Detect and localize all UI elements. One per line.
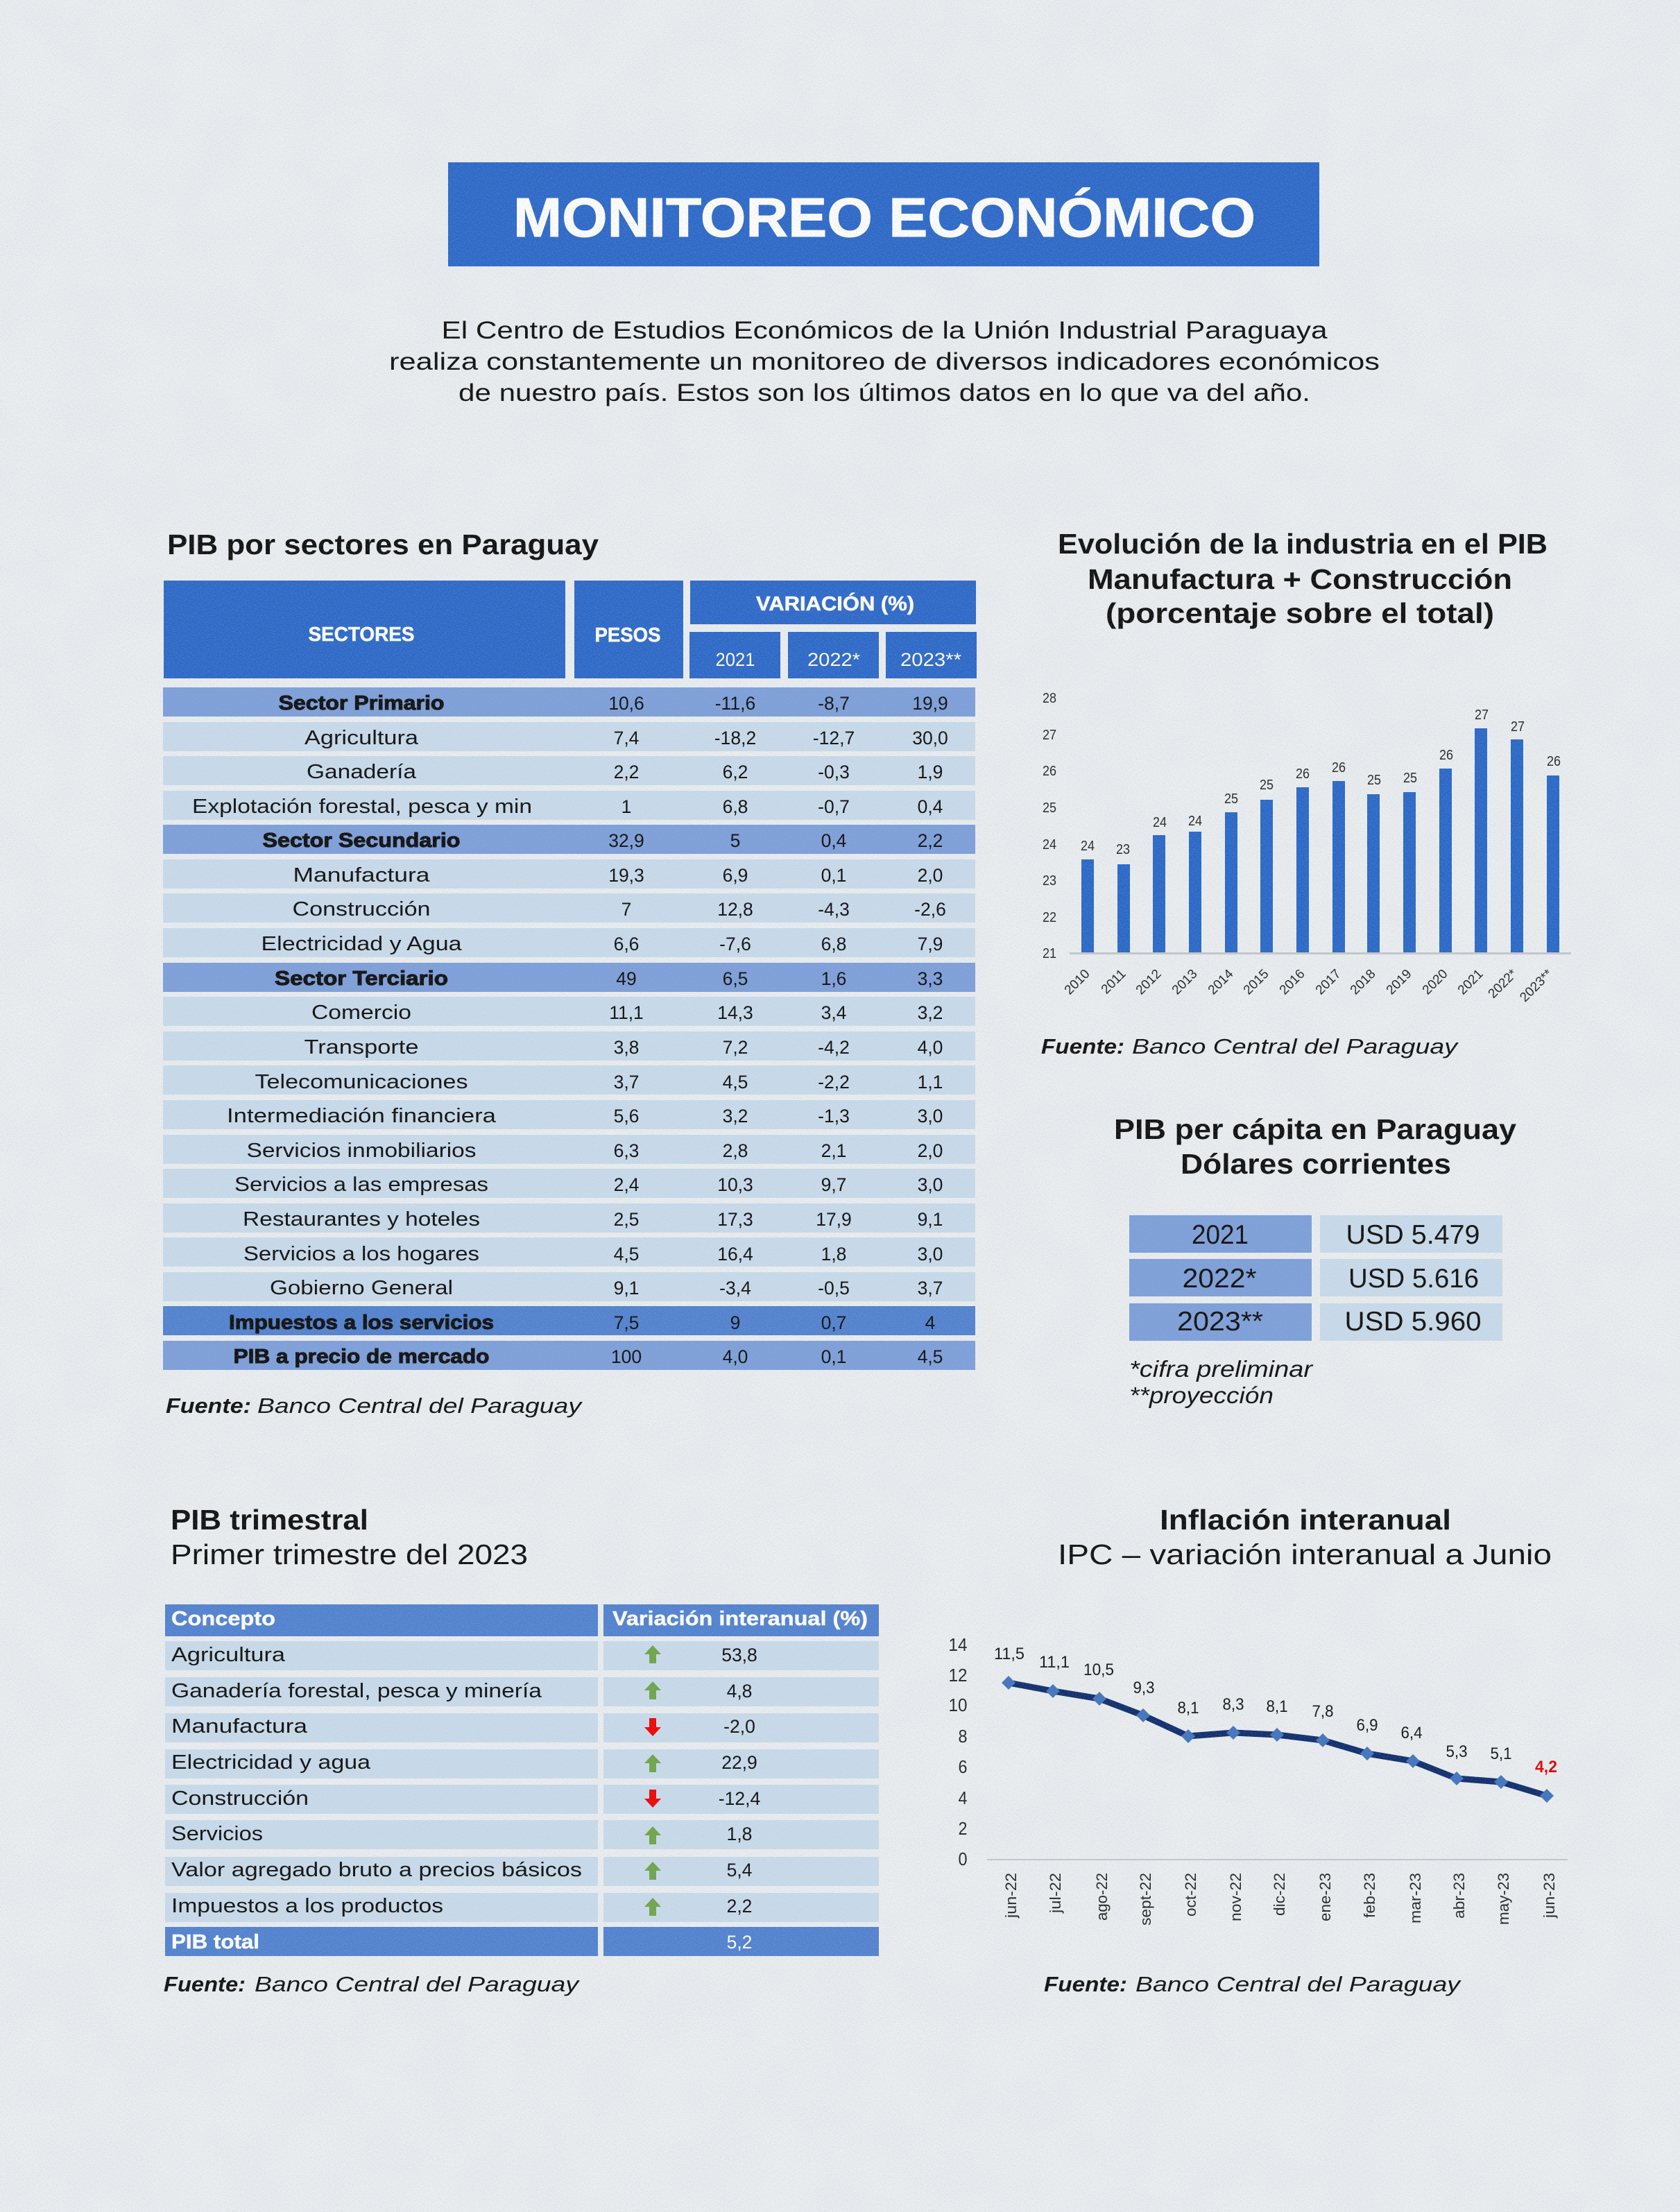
y axis labels [1043, 691, 1056, 961]
table header: Variación interanual (%) [612, 1608, 868, 1630]
row: Sector Primario: 10,6 [608, 693, 644, 714]
y axis labels: 10 [949, 1695, 967, 1715]
panel: PIB por sectores table [163, 581, 977, 1370]
row: Construcción: Construcción [171, 1787, 309, 1810]
row: Sector Secundario: 32,9 [608, 830, 644, 851]
row: Impuestos a los productos: Impuestos a los productos [171, 1895, 443, 1917]
data labels: 4,2 [1535, 1758, 1557, 1776]
row: Manufactura: 0,1 [821, 865, 846, 886]
row: Electricidad y agua [165, 1749, 879, 1778]
table header [164, 581, 977, 678]
intro text: de nuestro país. Estos son los últimos datos en lo que va del año. [458, 379, 1310, 406]
source: PIB trimestral: Fuente: [164, 1972, 246, 1996]
data line [1009, 1683, 1547, 1796]
row: Impuestos a los servicios: 7,5 [614, 1312, 639, 1333]
bar value labels [1081, 708, 1561, 857]
row: Ganadería: 1,9 [918, 762, 943, 782]
x axis year labels: 2010 [1062, 967, 1093, 997]
row: Intermediación financiera: -1,3 [818, 1106, 850, 1126]
heading: PIB trimestral: Primer trimestre del 2023 [171, 1538, 528, 1570]
heading: Inflación interanual: IPC – variación interanual a Junio [1058, 1538, 1552, 1570]
row: PIB total [165, 1927, 879, 1956]
x axis year labels: 2013 [1169, 967, 1201, 997]
row: Agricultura: Agricultura [305, 727, 418, 749]
x axis year labels: 2023** [1517, 966, 1556, 1005]
panel: PIB per cápita table [1129, 1215, 1502, 1341]
row: Servicios: 1,8 [727, 1824, 752, 1844]
row: Construcción [293, 898, 946, 920]
x axis year labels: 2019 [1384, 967, 1415, 997]
row: Manufactura: Manufactura [293, 864, 430, 886]
bars [1081, 728, 1559, 953]
row: PIB a precio de mercado: 4,0 [723, 1346, 748, 1367]
bar value labels: 23 [1116, 842, 1130, 857]
row: Impuestos a los servicios: 9 [730, 1312, 740, 1333]
y axis labels: 23 [1043, 873, 1056, 889]
y axis labels: 12 [949, 1665, 967, 1686]
row: PIB a precio de mercado: PIB a precio de mercado [233, 1346, 490, 1368]
row: Servicios a los hogares: 4,5 [614, 1244, 639, 1264]
panel: PIB trimestral table [165, 1604, 879, 1956]
x axis month labels: feb-23 [1361, 1873, 1378, 1918]
row: Servicios a las empresas: Servicios a las empresas [234, 1174, 488, 1196]
source: inflación: Banco Central del Paraguay [1135, 1972, 1462, 1996]
row: Sector Secundario: 0,4 [821, 830, 846, 851]
source: PIB por sectores: Banco Central del Paraguay [257, 1394, 583, 1418]
x axis month labels: ene-23 [1317, 1873, 1334, 1921]
row: Manufactura: 2,0 [918, 865, 943, 886]
table header: 2022* [807, 649, 861, 670]
source: evolución de la industria: Banco Central del Paraguay [1132, 1034, 1459, 1058]
x axis month labels [1002, 1873, 1558, 1926]
row: PIB a precio de mercado [233, 1346, 943, 1368]
row: Agricultura: Agricultura [171, 1644, 285, 1666]
row: Intermediación financiera [227, 1105, 943, 1127]
bar value labels: 27 [1475, 708, 1489, 723]
row: Electricidad y Agua: Electricidad y Agua [261, 933, 462, 955]
title [448, 162, 1319, 266]
row: Telecomunicaciones: Telecomunicaciones [255, 1071, 468, 1093]
row: Sector Terciario: 49 [616, 968, 637, 989]
y axis labels: 8 [959, 1726, 967, 1747]
data labels: 9,3 [1133, 1679, 1154, 1697]
row: Manufactura: 6,9 [723, 865, 748, 886]
source: inflación [1044, 1972, 1462, 1996]
bar value labels: 24 [1153, 815, 1167, 830]
y axis labels: 25 [1043, 800, 1056, 816]
data labels: 6,9 [1357, 1716, 1378, 1735]
data labels: 8,1 [1267, 1697, 1287, 1716]
x axis year labels: 2017 [1313, 967, 1344, 997]
row: Telecomunicaciones [255, 1071, 943, 1093]
row: Agricultura: 30,0 [912, 728, 948, 748]
x axis year labels: 2018 [1348, 967, 1379, 997]
y axis labels: 27 [1043, 728, 1056, 743]
heading: Evolución de la industria: (porcentaje sobre el total) [1106, 597, 1494, 629]
x axis month labels: ago-22 [1093, 1873, 1111, 1921]
y axis labels: 28 [1043, 691, 1056, 706]
x axis year labels: 2012 [1133, 967, 1165, 997]
row: Servicios [165, 1820, 879, 1849]
row: Manufactura: Manufactura [171, 1715, 307, 1738]
row: Manufactura: 19,3 [608, 865, 644, 886]
row: Restaurantes y hoteles: Restaurantes y hoteles [243, 1208, 480, 1231]
row: Intermediación financiera: 3,0 [918, 1106, 943, 1126]
row: Ganadería forestal [165, 1677, 879, 1706]
row: Ganadería forestal: 4,8 [727, 1681, 752, 1701]
panel: PIB per cápita table: 2022* [1182, 1264, 1257, 1294]
table header [165, 1604, 879, 1636]
row: Servicios inmobiliarios: 2,0 [918, 1140, 943, 1161]
x axis year labels: 2015 [1241, 967, 1272, 997]
data labels: 7,8 [1312, 1702, 1333, 1721]
y axis labels: 14 [949, 1634, 967, 1655]
x axis month labels: abr-23 [1450, 1873, 1468, 1919]
row: Comercio: Comercio [311, 1002, 411, 1024]
y axis labels: 0 [959, 1849, 967, 1869]
row: Valor agregado: 5,4 [727, 1860, 752, 1880]
row: Comercio: 14,3 [717, 1002, 753, 1023]
row: Explotación forestal: 1 [622, 796, 631, 817]
row: Transporte [304, 1036, 943, 1058]
heading: PIB per cápita: PIB per cápita en Paraguay [1114, 1113, 1517, 1145]
heading: PIB per cápita [1114, 1113, 1517, 1180]
row: Valor agregado: Valor agregado bruto a precios básicos [171, 1859, 582, 1881]
row: Comercio: 11,1 [609, 1002, 644, 1023]
row: Construcción: -4,3 [818, 899, 850, 920]
row: Agricultura [305, 727, 948, 749]
row: Restaurantes y hoteles: 17,9 [816, 1209, 852, 1230]
row: Explotación forestal [192, 796, 943, 818]
row: Sector Primario [279, 692, 948, 714]
row: Sector Terciario: 6,5 [723, 968, 748, 989]
data labels: 10,5 [1083, 1661, 1114, 1679]
row: Servicios inmobiliarios [247, 1140, 943, 1162]
row: Explotación forestal: Explotación forestal, pesca y min [192, 796, 532, 818]
row: Transporte: 4,0 [918, 1037, 943, 1058]
intro text: El Centro de Estudios Económicos de la Unión Industrial Paraguaya [441, 316, 1328, 344]
row: Servicios a los hogares [243, 1243, 943, 1265]
row: Sector Secundario: 2,2 [918, 830, 943, 851]
y axis labels: 2 [959, 1818, 967, 1839]
bar value labels: 25 [1367, 773, 1381, 788]
x axis month labels: sept-22 [1137, 1873, 1154, 1926]
row: Sector Secundario: Sector Secundario [262, 830, 461, 852]
bar value labels: 25 [1224, 791, 1238, 807]
row: Transporte: 7,2 [723, 1037, 748, 1058]
row: Impuestos a los servicios: 4 [925, 1312, 935, 1333]
row: Electricidad y agua: 22,9 [721, 1752, 757, 1773]
y axis labels: 4 [959, 1787, 967, 1808]
row: Servicios inmobiliarios: 6,3 [614, 1140, 639, 1161]
x axis month labels: nov-22 [1227, 1873, 1244, 1921]
data labels: 5,3 [1446, 1742, 1468, 1761]
x axis year labels: 2011 [1099, 967, 1129, 997]
x axis month labels: jun-23 [1541, 1873, 1558, 1919]
heading: Inflación interanual [1058, 1504, 1552, 1570]
x axis month labels: may-23 [1495, 1873, 1512, 1925]
bar chart: evolución de la industria [1043, 691, 1571, 1005]
row: Sector Secundario: 5 [730, 830, 740, 851]
row: Electricidad y Agua: -7,6 [719, 934, 751, 954]
row: Agricultura: -12,7 [813, 728, 855, 748]
source: evolución de la industria [1041, 1034, 1459, 1058]
row: Construcción: 12,8 [717, 899, 753, 920]
y axis labels: 24 [1043, 837, 1056, 852]
footnotes: *cifra preliminar [1129, 1356, 1314, 1382]
line chart: inflación interanual [949, 1634, 1568, 1926]
row: Ganadería: -0,3 [818, 762, 850, 782]
row: Servicios a las empresas: 3,0 [918, 1174, 943, 1195]
x axis year labels: 2022* [1486, 966, 1520, 1002]
row: Servicios a los hogares: 3,0 [918, 1244, 943, 1264]
row: Ganadería forestal: Ganadería forestal, pesca y minería [171, 1680, 542, 1702]
row: Ganadería: 6,2 [723, 762, 748, 782]
row: Impuestos a los productos: 2,2 [727, 1896, 752, 1917]
x axis year labels: 2020 [1420, 967, 1451, 997]
row: Sector Secundario [262, 830, 943, 852]
row: Sector Terciario: Sector Terciario [275, 968, 448, 990]
bar value labels: 25 [1403, 771, 1417, 786]
intro text [389, 316, 1380, 406]
row: PIB a precio de mercado: 4,5 [918, 1346, 943, 1367]
row: Ganadería [307, 761, 943, 783]
data markers [1002, 1676, 1554, 1803]
row: Valor agregado [165, 1857, 879, 1886]
footnotes [1129, 1356, 1314, 1408]
panel: PIB per cápita table: 2021 [1192, 1220, 1249, 1250]
row: Gobierno General: Gobierno General [270, 1277, 453, 1299]
row: Explotación forestal: -0,7 [818, 796, 850, 817]
row: Electricidad y Agua: 6,8 [821, 934, 846, 954]
bar value labels: 26 [1332, 760, 1346, 775]
data labels: 8,3 [1222, 1695, 1244, 1714]
bar value labels: 26 [1547, 754, 1561, 769]
panel: PIB per cápita table: 2023** [1177, 1307, 1263, 1337]
table header: VARIACIÓN (%) [756, 592, 914, 615]
bar value labels: 26 [1296, 766, 1310, 782]
x axis month labels: jun-22 [1002, 1873, 1020, 1919]
row: Restaurantes y hoteles: 9,1 [918, 1209, 943, 1230]
x axis year labels: 2014 [1206, 966, 1237, 997]
x axis month labels: oct-22 [1182, 1873, 1199, 1917]
heading: Evolución de la industria [1058, 528, 1548, 629]
x axis month labels: mar-23 [1407, 1873, 1424, 1923]
row: Telecomunicaciones: -2,2 [818, 1072, 850, 1092]
row: Agricultura: -18,2 [714, 728, 756, 748]
source: PIB trimestral [164, 1972, 581, 1996]
row: Ganadería: 2,2 [614, 762, 639, 782]
data labels: 11,1 [1039, 1653, 1070, 1672]
row: Intermediación financiera: 3,2 [723, 1106, 748, 1126]
row: Sector Primario: 19,9 [912, 693, 948, 714]
row: Transporte: -4,2 [818, 1037, 850, 1058]
row: Sector Primario: Sector Primario [279, 692, 444, 714]
heading: PIB trimestral: PIB trimestral [171, 1504, 368, 1536]
row: PIB total: PIB total [171, 1931, 259, 1953]
row: Construcción: -2,6 [914, 899, 946, 920]
heading: Inflación interanual: Inflación interanual [1160, 1504, 1451, 1536]
heading: PIB por sectores: PIB por sectores en Paraguay [167, 529, 599, 560]
row: Restaurantes y hoteles: 17,3 [717, 1209, 753, 1230]
row: PIB a precio de mercado: 0,1 [821, 1346, 846, 1367]
row: PIB a precio de mercado: 100 [611, 1346, 642, 1367]
row: Restaurantes y hoteles: 2,5 [614, 1209, 639, 1230]
row: Impuestos a los servicios: 0,7 [821, 1312, 846, 1333]
row: Electricidad y agua: Electricidad y agua [171, 1751, 370, 1774]
row: PIB total: 5,2 [727, 1932, 752, 1953]
row: Comercio: 3,4 [821, 1002, 846, 1023]
row: Servicios a los hogares: 16,4 [717, 1244, 753, 1264]
panel: PIB per cápita table: USD 5.479 [1346, 1220, 1480, 1250]
source: inflación: Fuente: [1044, 1972, 1127, 1996]
row: Servicios inmobiliarios: 2,1 [821, 1140, 846, 1161]
row: Servicios inmobiliarios: Servicios inmobiliarios [247, 1140, 476, 1162]
row: Electricidad y Agua [261, 933, 943, 955]
heading: PIB per cápita: Dólares corrientes [1181, 1148, 1451, 1180]
y axis labels: 6 [959, 1756, 967, 1777]
row: Intermediación financiera: 5,6 [614, 1106, 639, 1126]
title: MONITOREO ECONÓMICO [513, 187, 1255, 248]
row: Servicios a los hogares: 1,8 [821, 1244, 846, 1264]
row: Servicios a las empresas: 2,4 [614, 1174, 639, 1195]
row: Gobierno General: -0,5 [818, 1278, 850, 1298]
table header: PESOS [595, 624, 660, 646]
x axis year labels: 2021 [1455, 967, 1486, 997]
bar value labels: 24 [1188, 814, 1202, 829]
row: Construcción: 7 [622, 899, 631, 920]
table header: 2021 [716, 649, 755, 670]
row: Servicios: Servicios [171, 1823, 263, 1845]
row: Gobierno General: 9,1 [614, 1278, 639, 1298]
row: Impuestos a los servicios: Impuestos a los servicios [229, 1312, 494, 1334]
row: Sector Terciario [275, 968, 943, 990]
bar value labels: 27 [1511, 719, 1525, 735]
row: Explotación forestal: 0,4 [918, 796, 943, 817]
row: Electricidad y Agua: 7,9 [918, 934, 943, 954]
row: Agricultura [165, 1641, 879, 1670]
row: Telecomunicaciones: 4,5 [723, 1072, 748, 1092]
row: Construcción: -12,4 [719, 1788, 760, 1809]
data labels: 6,4 [1401, 1724, 1422, 1742]
table header: SECTORES [308, 624, 415, 646]
y axis labels [949, 1634, 967, 1869]
row: Comercio [311, 1002, 943, 1024]
heading: Evolución de la industria: Evolución de la industria en el PIB [1058, 528, 1548, 560]
source: evolución de la industria: Fuente: [1041, 1034, 1124, 1058]
row: Explotación forestal: 6,8 [723, 796, 748, 817]
row: Servicios inmobiliarios: 2,8 [723, 1140, 748, 1161]
row: Agricultura: 53,8 [721, 1645, 757, 1665]
bar value labels: 25 [1260, 778, 1274, 793]
row: Construcción [165, 1785, 879, 1814]
row: Sector Primario: -8,7 [818, 693, 850, 714]
row: Sector Terciario: 1,6 [821, 968, 846, 989]
row: Servicios a las empresas: 9,7 [821, 1174, 846, 1195]
data labels: 5,1 [1490, 1744, 1512, 1763]
row: Servicios a las empresas [234, 1174, 943, 1196]
row: Telecomunicaciones: 3,7 [614, 1072, 639, 1092]
row: Impuestos a los productos [165, 1893, 879, 1922]
row: Agricultura: 7,4 [614, 728, 639, 748]
row: Impuestos a los servicios [229, 1312, 935, 1334]
source: PIB trimestral: Banco Central del Paraguay [255, 1972, 581, 1996]
x axis year labels: 2016 [1277, 967, 1308, 997]
table row backgrounds [163, 687, 975, 1370]
x axis year labels [1062, 966, 1556, 1005]
row: Construcción: Construcción [293, 898, 430, 920]
row: Manufactura: -2,0 [723, 1716, 755, 1737]
y axis labels: 21 [1043, 946, 1056, 961]
row: Manufactura [165, 1713, 879, 1742]
heading: PIB trimestral [171, 1504, 528, 1570]
row: Transporte: Transporte [304, 1036, 419, 1058]
table header: Concepto [171, 1608, 275, 1630]
x axis month labels: jul-22 [1047, 1873, 1064, 1914]
row: Intermediación financiera: Intermediación financiera [227, 1105, 496, 1127]
bar value labels: 24 [1081, 839, 1095, 854]
row: Gobierno General: -3,4 [719, 1278, 751, 1298]
row: Telecomunicaciones: 1,1 [918, 1072, 943, 1092]
y axis labels: 22 [1043, 910, 1056, 925]
row: Electricidad y Agua: 6,6 [614, 934, 639, 954]
footnotes: **proyección [1129, 1382, 1274, 1408]
x axis month labels: dic-22 [1271, 1873, 1288, 1916]
row: Gobierno General: 3,7 [918, 1278, 943, 1298]
row: Gobierno General [270, 1277, 943, 1299]
data labels [994, 1645, 1557, 1776]
panel: PIB per cápita table: USD 5.616 [1348, 1264, 1479, 1294]
table header: 2023** [900, 649, 962, 670]
data labels: 8,1 [1178, 1699, 1199, 1717]
y axis labels: 26 [1043, 764, 1056, 779]
intro text: realiza constantemente un monitoreo de diversos indicadores económicos [389, 348, 1380, 375]
row: Sector Primario: -11,6 [715, 693, 755, 714]
data labels: 11,5 [994, 1645, 1025, 1663]
row: Sector Terciario: 3,3 [918, 968, 943, 989]
source: PIB por sectores: Fuente: [166, 1394, 251, 1418]
heading: Evolución de la industria: Manufactura + Construcción [1088, 563, 1512, 595]
row: Comercio: 3,2 [918, 1002, 943, 1023]
panel: PIB per cápita table: USD 5.960 [1344, 1307, 1482, 1337]
row: Servicios a los hogares: Servicios a los hogares [243, 1243, 479, 1265]
row: Manufactura [293, 864, 943, 886]
row: Transporte: 3,8 [614, 1037, 639, 1058]
row: Ganadería: Ganadería [307, 761, 416, 783]
source: PIB por sectores [166, 1394, 583, 1418]
row: Servicios a las empresas: 10,3 [717, 1174, 753, 1195]
bar value labels: 26 [1439, 748, 1453, 763]
row: Restaurantes y hoteles [243, 1208, 943, 1231]
